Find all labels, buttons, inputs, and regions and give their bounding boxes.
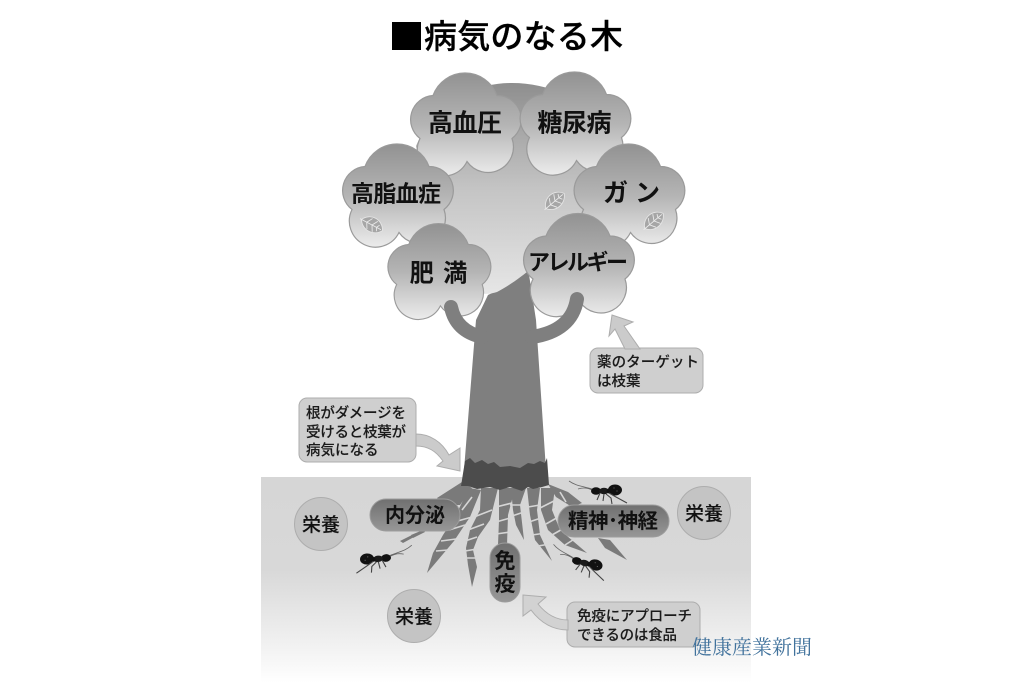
roots [400,482,627,587]
nutrient circle right: 栄養 [685,503,723,525]
callout: root damage: 根がダメージを [306,404,406,422]
ant lower right [548,544,610,582]
nutrient circle left [294,498,348,550]
callout: food and immunity: できるのは食品 [577,627,677,644]
watermark: 健康産業新聞 [692,636,812,659]
branches [451,299,577,337]
ant top right [569,481,627,504]
pill: 免疫: 免 [494,550,516,573]
tree crown [416,83,616,294]
nutrient circle right [678,486,730,540]
pill: 精神・神経 [558,505,669,537]
cloud: 糖尿病 [520,72,631,175]
ant left [354,545,414,574]
ground [261,477,751,683]
callout: drug target: は枝葉 [597,373,641,390]
nutrient circle left: 栄養 [302,514,340,536]
callout: root damage: 病気になる [306,442,378,459]
pill: 内分泌 [370,499,460,531]
arrow: to leaves [609,315,640,349]
cloud: アレルギー: アレルギー [528,250,628,275]
pill: 精神・神経: 精神･神経 [568,510,658,533]
pill: 内分泌: 内分泌 [385,504,445,527]
callout: food and immunity: 免疫にアプローチ [577,607,692,625]
icon: leaf right [639,207,668,235]
cloud: アレルギー [524,213,634,317]
callout: root damage [299,398,416,462]
cloud: 肥満 [388,224,491,319]
cloud: 肥満: 肥 満 [410,261,467,288]
cloud: 高血圧: 高血圧 [428,110,502,138]
cloud: 高脂血症: 高脂血症 [351,180,441,206]
pill: 免疫: 疫 [494,573,516,596]
pill: 免疫 [490,543,520,602]
arrow: to immunity [523,595,568,630]
nutrient circle bottom: 栄養 [395,606,433,628]
arrow: to roots [416,434,460,471]
damaged root band [461,458,549,491]
icon: leaf centre [540,187,569,215]
cloud: 糖尿病: 糖尿病 [538,110,612,138]
callout: drug target [590,348,703,393]
cloud: 高血圧 [411,73,521,176]
cloud: 高脂血症 [343,144,453,247]
title: 病気のなる木 [424,18,623,55]
cloud: ガン [574,144,685,247]
root damage gaps [436,492,576,558]
tree trunk [464,268,546,470]
callout: drug target: 薬のターゲット [597,354,699,371]
callout: root damage: 受けると枝葉が [306,423,406,441]
callout: food and immunity [567,602,700,647]
cloud: ガン: ガン [603,180,660,208]
nutrient circle bottom [388,590,440,642]
icon: leaf left [357,212,386,237]
